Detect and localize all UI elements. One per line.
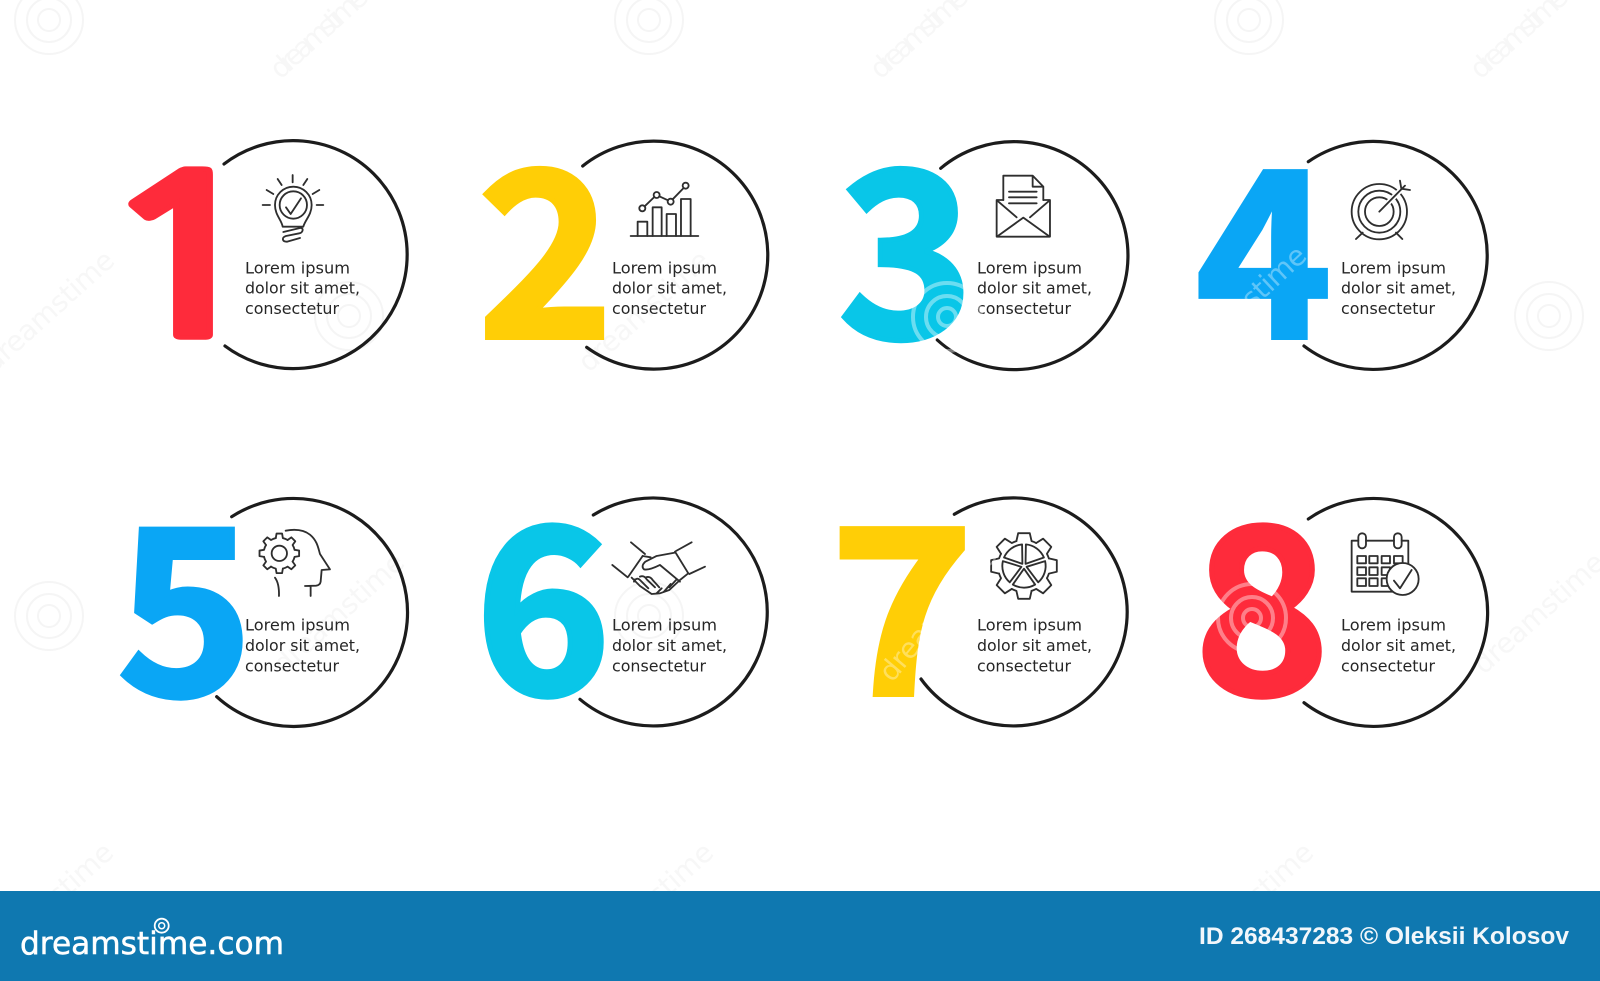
description text 2: Lorem ipsum [612, 258, 717, 278]
panel: step 2 [478, 72, 768, 404]
description text 6: dolor sit amet, [612, 636, 727, 655]
text: dreamstime [571, 243, 716, 378]
numeral 8: 8 [1194, 428, 1330, 761]
numeral 3: 3 [838, 72, 974, 404]
panel: step 8 [1194, 428, 1488, 761]
description text 7 [977, 616, 1092, 676]
footer bar [0, 891, 1600, 981]
description text 5 [245, 616, 360, 676]
numeral 2: 2 [478, 72, 613, 404]
icon: gear with pie chart [991, 533, 1057, 599]
description text 3: consectetur [977, 299, 1071, 318]
description text 7: consectetur [977, 656, 1071, 676]
description text 2: consectetur [612, 299, 706, 318]
description text 7: dolor sit amet, [977, 636, 1092, 655]
numeral 5: 5 [117, 429, 253, 762]
description text 3 [977, 258, 1092, 318]
description text 7: Lorem ipsum [977, 616, 1082, 634]
panel: step 4 [1196, 72, 1487, 404]
ring outline 4 [1304, 141, 1487, 369]
icon: calendar with check [1352, 533, 1419, 595]
numeral 6: 6 [475, 428, 611, 761]
description text 1: consectetur [245, 299, 339, 318]
description text 4: dolor sit amet, [1341, 278, 1456, 298]
text: dreamstime [1170, 239, 1313, 375]
description text 1: Lorem ipsum [245, 258, 350, 278]
panel: step 3 [838, 72, 1128, 404]
numeral 7: 7 [830, 429, 974, 761]
panel: step 6 [475, 428, 767, 761]
footer image ID and credit: ID 268437283 © Oleksii Kolosov [1199, 923, 1570, 950]
description text 4 [1341, 258, 1456, 318]
panel: step 5 [117, 429, 408, 762]
description text 8: consectetur [1341, 656, 1435, 676]
ring outline 2 [583, 141, 768, 369]
description text 1: dolor sit amet, [245, 278, 360, 298]
description text 3: dolor sit amet, [977, 278, 1092, 298]
text: dreamstime [575, 835, 720, 970]
text: dreamstime [1175, 835, 1320, 970]
ring outline 3 [937, 142, 1128, 370]
numeral 4: 4 [1196, 72, 1332, 404]
ring outline 7 [921, 498, 1127, 726]
description text 8 [1341, 616, 1456, 676]
panel: step 1 [91, 141, 407, 370]
icon: head with gear [259, 530, 330, 596]
footer logo: dreamstime.com [20, 926, 284, 962]
description text 8: dolor sit amet, [1341, 636, 1456, 655]
icon: light bulb with check [263, 175, 323, 242]
icon: target with arrow [1352, 181, 1410, 239]
ring outline 8 [1304, 498, 1488, 726]
description text 6: Lorem ipsum [612, 616, 717, 634]
description text 5: consectetur [245, 656, 339, 676]
ring outline 1 [224, 141, 407, 369]
icon: handshake [612, 542, 705, 594]
ring outline 5 [217, 498, 408, 726]
panel: step 7 [830, 429, 1127, 761]
description text 6 [612, 616, 727, 676]
description text 4: Lorem ipsum [1341, 258, 1446, 278]
description text 2: dolor sit amet, [612, 278, 727, 298]
description text 8: Lorem ipsum [1341, 616, 1446, 634]
description text 1 [245, 258, 360, 318]
ring outline 6 [580, 498, 767, 726]
description text 5: Lorem ipsum [245, 616, 350, 634]
numeral 1: 1 [91, 151, 281, 370]
description text 2 [612, 258, 727, 318]
text: dreamstime [266, 545, 411, 680]
description text 5: dolor sit amet, [245, 636, 360, 655]
icon: envelope with letter [997, 176, 1050, 237]
description text 3: Lorem ipsum [977, 258, 1082, 278]
icon: bar chart with trend line [631, 183, 698, 236]
text: dreamstime [872, 540, 1003, 688]
description text 6: consectetur [612, 656, 706, 676]
description text 4: consectetur [1341, 299, 1435, 318]
